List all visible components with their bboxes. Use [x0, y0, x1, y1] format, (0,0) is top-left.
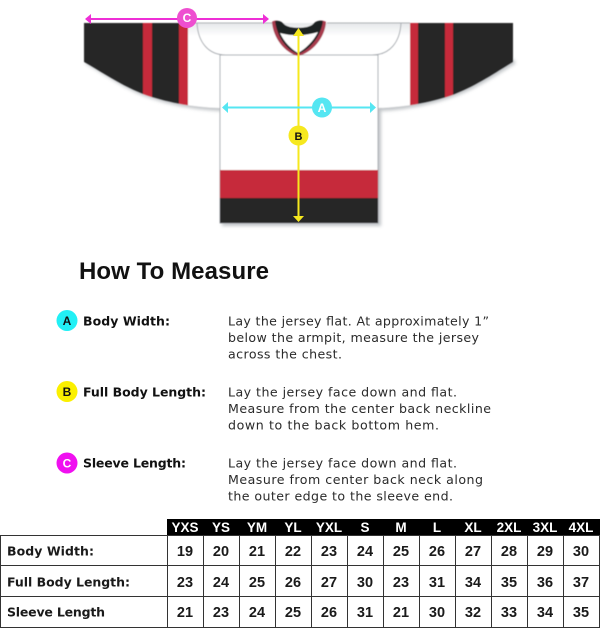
row: sleeve length: 24 — [249, 605, 265, 621]
row: sleeve length: 23 — [213, 605, 229, 621]
table header: 4XL — [569, 520, 593, 535]
row: full body length: 35 — [501, 575, 517, 591]
row: sleeve length: 35 — [573, 605, 589, 621]
jersey yoke — [188, 23, 410, 60]
jersey collar — [272, 21, 326, 56]
row: body width: 27 — [465, 544, 481, 560]
row: full body length: 34 — [465, 575, 481, 591]
badge B: B — [63, 385, 72, 399]
row: full body length: 31 — [429, 575, 445, 591]
row: full body length: 23 — [177, 575, 193, 591]
table header — [167, 519, 600, 535]
right sleeve — [377, 23, 513, 113]
table header: L — [433, 520, 441, 535]
measure item A — [56, 310, 489, 362]
table header: S — [360, 520, 370, 535]
badge A — [56, 310, 78, 331]
measure item C: Sleeve Length: — [83, 456, 186, 470]
measure item B: down to the back bottom hem. — [228, 418, 439, 432]
row: body width: 23 — [321, 544, 337, 560]
row: body width: 20 — [213, 544, 229, 560]
row: full body length — [7, 574, 589, 591]
row: full body length: 37 — [573, 575, 589, 591]
measure item C: Lay the jersey face down and flat. — [228, 456, 457, 470]
row: sleeve length: 26 — [321, 605, 337, 621]
row: body width: 30 — [573, 544, 589, 560]
row: body width: 21 — [249, 544, 265, 560]
left sleeve — [84, 23, 221, 113]
measurement C: sleeve length arrow: C — [183, 11, 192, 25]
row: full body length: 26 — [285, 575, 301, 591]
measure item B: Measure from the center back neckline — [228, 401, 491, 416]
row: body width: 24 — [357, 544, 373, 560]
badge C — [56, 452, 78, 474]
table header: YL — [284, 520, 302, 535]
row: full body length: 36 — [537, 575, 553, 591]
row: body width: 29 — [537, 544, 553, 560]
table header: YXL — [316, 520, 342, 535]
row: sleeve length: 32 — [465, 605, 481, 621]
row: sleeve length: 33 — [501, 605, 517, 621]
measure item C: the outer edge to the sleeve end. — [228, 488, 453, 504]
table header: YS — [212, 520, 230, 535]
title: How To Measure — [79, 258, 269, 285]
table header: M — [395, 520, 407, 535]
badge B — [56, 381, 78, 402]
row: full body length: 24 — [213, 575, 229, 591]
table header: 3XL — [533, 520, 557, 535]
table header: YM — [247, 520, 267, 535]
measure item A: below the armpit, measure the jersey — [228, 330, 480, 345]
row: full body length: 25 — [249, 575, 265, 591]
measure item C — [56, 452, 483, 504]
row: body width: Body Width: — [7, 544, 94, 558]
badge C: C — [63, 456, 72, 470]
row: body width: 25 — [393, 544, 409, 560]
row: sleeve length: 21 — [393, 605, 409, 621]
badge A: A — [63, 314, 72, 328]
row: body width: 26 — [429, 544, 445, 560]
row: sleeve length: Sleeve Length — [7, 604, 105, 620]
row: sleeve length: 21 — [177, 605, 193, 621]
size table — [0, 519, 600, 628]
table header: XL — [464, 520, 482, 535]
row: full body length: 23 — [393, 575, 409, 591]
measure item A: Lay the jersey flat. At approximately 1” — [228, 314, 489, 328]
row: body width — [7, 544, 589, 560]
measure item C: Measure from center back neck along — [228, 472, 483, 487]
row: body width: 28 — [501, 544, 517, 560]
measure item B: Full Body Length: — [83, 384, 206, 400]
measure item A: Body Width: — [83, 314, 170, 328]
row: sleeve length: 30 — [429, 605, 445, 621]
measurement A: body width arrow: A — [318, 101, 327, 115]
jersey shadow — [86, 60, 515, 226]
measure item B: Lay the jersey face down and flat. — [228, 384, 457, 400]
row: sleeve length: 34 — [537, 605, 553, 621]
measure item A: across the chest. — [228, 346, 342, 362]
row: body width: 19 — [177, 544, 193, 560]
jersey body — [220, 55, 378, 223]
row: body width: 22 — [285, 544, 301, 560]
row: full body length: Full Body Length: — [7, 574, 130, 590]
measurement A: body width arrow — [222, 98, 376, 118]
row: full body length: 27 — [321, 575, 337, 591]
measurement B: body length arrow — [288, 28, 308, 222]
jersey illustration — [84, 21, 515, 226]
table header: YXS — [171, 520, 199, 535]
row: full body length: 30 — [357, 575, 373, 591]
row: sleeve length — [7, 604, 589, 621]
row: sleeve length: 31 — [357, 605, 373, 621]
table header: 2XL — [497, 520, 521, 535]
measure item B — [56, 381, 491, 432]
row: sleeve length: 25 — [285, 605, 301, 621]
measurement C: sleeve length arrow — [85, 8, 269, 28]
measurement B: body length arrow: B — [295, 131, 303, 143]
